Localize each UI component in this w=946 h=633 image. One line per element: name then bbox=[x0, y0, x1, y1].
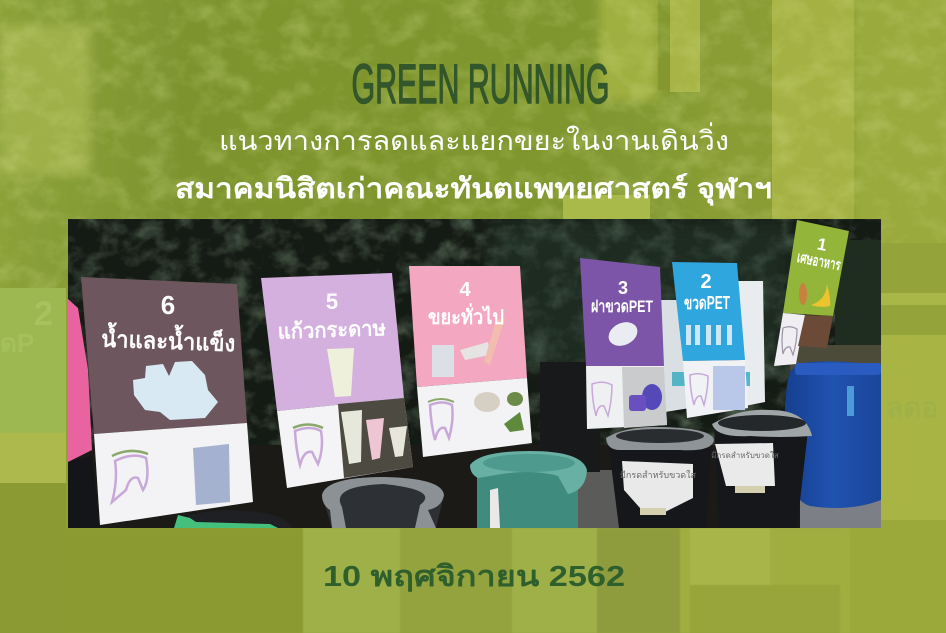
bins bbox=[174, 410, 812, 528]
bin: black with paper note bbox=[606, 427, 714, 528]
sign 6: water and ice: น้ำและน้ำแข็ง bbox=[101, 322, 236, 356]
background: faded tree and event photo: 2 bbox=[34, 295, 53, 333]
sign 4: general waste bbox=[409, 266, 532, 457]
bin: black with paper note, right: มีกรดสำหรับขวดใส bbox=[711, 451, 779, 460]
sign 2: PET bottles bbox=[672, 262, 748, 418]
sign 2: PET bottles: ขวดPET bbox=[684, 293, 730, 313]
sign 6: water and ice bbox=[81, 277, 253, 525]
background: faded tree and event photo: ดP bbox=[0, 328, 34, 358]
blue barrel bbox=[785, 361, 881, 508]
bin: teal bbox=[470, 451, 587, 528]
tooth mascots bbox=[112, 327, 797, 502]
sign 1: food waste: 1 bbox=[816, 234, 829, 255]
sign 3: PET caps: 3 bbox=[618, 278, 628, 298]
bin: black with paper note, right bbox=[712, 410, 812, 501]
sign 5: paper cups: แก้วกระดาษ bbox=[277, 316, 386, 344]
photo: waste sorting stations bbox=[68, 219, 881, 528]
sign 3: PET caps: ฝาขวดPET bbox=[591, 297, 653, 316]
sign 5: paper cups: 5 bbox=[326, 289, 338, 314]
subtitle: แนวทางการลดและแยกขยะในงานเดินวิ่ง bbox=[219, 122, 729, 156]
sign 1: food waste: เศษอาหาร bbox=[796, 249, 843, 274]
sign 4: general waste: ขยะทั่วไป bbox=[428, 302, 504, 329]
bin: black with paper note: มีกรดสำหรับขวดใส bbox=[620, 470, 697, 480]
date: 10 พฤศจิกายน 2562 bbox=[323, 561, 625, 593]
background: faded tree and event photo: ลดอ bbox=[886, 392, 938, 423]
sign 3: PET caps bbox=[580, 258, 667, 429]
sign 4: general waste: 4 bbox=[459, 279, 471, 301]
sign 5: paper cups bbox=[261, 273, 413, 488]
title: GREEN RUNNING bbox=[352, 52, 610, 115]
person in pink shirt bbox=[68, 299, 92, 462]
sign 2: PET bottles: 2 bbox=[700, 271, 712, 293]
photo backdrop: dark foliage bbox=[68, 219, 881, 528]
sign 6: water and ice: 6 bbox=[161, 290, 175, 320]
bin: grey liner bbox=[322, 477, 444, 528]
bin: green rim bbox=[174, 510, 292, 528]
sign 1: food waste bbox=[774, 220, 849, 366]
organisation name: สมาคมนิสิตเก่าคณะทันตแพทยศาสตร์ จุฬาฯ bbox=[175, 173, 772, 206]
